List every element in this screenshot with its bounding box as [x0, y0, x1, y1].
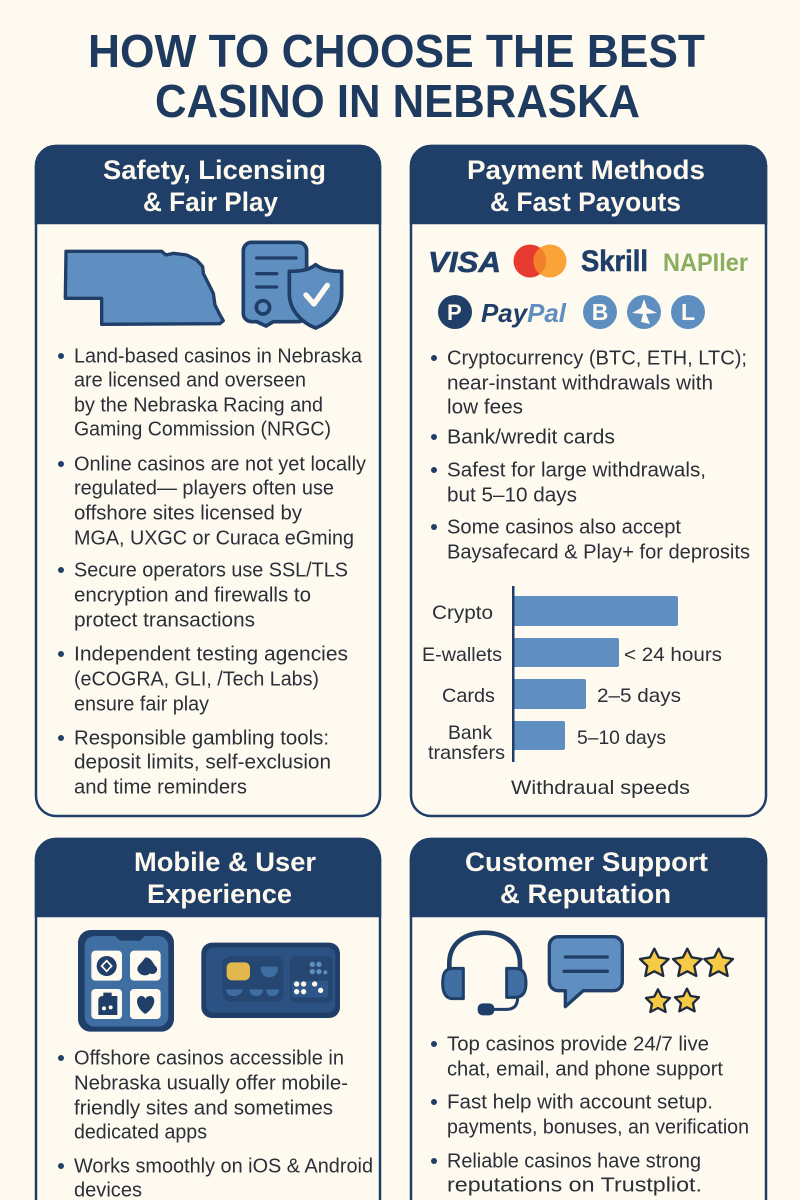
text block: support bullets: payments, bonuses, an verification [447, 1116, 749, 1138]
text block: support bullets: chat, email, and phone support [447, 1058, 723, 1080]
bar: e-wallets: < 24 hours [624, 644, 722, 666]
text block: safety bullets: Land-based casinos in Nebraska [74, 345, 363, 367]
bar chart: withdrawal speeds [422, 586, 722, 799]
bar: cards: 2–5 days [597, 685, 681, 707]
icon: Mastercard logo [514, 244, 566, 278]
text block: safety bullets: Secure operators use SSL/TLS [74, 559, 348, 581]
icon: PayPal logo [438, 295, 567, 329]
text block: support bullets [431, 1033, 749, 1196]
heading: support [411, 839, 766, 916]
text block: payment bullets: Some casinos also accept [447, 516, 681, 538]
text block: mobile bullets: Works smoothly on iOS & Android [74, 1155, 373, 1177]
icon: Litecoin coin: L [681, 299, 695, 325]
bar: bank transfers: 5–10 days [577, 727, 666, 749]
icon: licence document and shield [243, 242, 342, 328]
text block: safety bullets: by the Nebraska Racing and [74, 394, 323, 416]
bar: e-wallets [422, 638, 722, 667]
title [88, 25, 705, 127]
icon: Ethereum coin [627, 295, 661, 329]
text block: safety bullets: Independent testing agencies [74, 643, 348, 665]
heading: payments: Payment Methods [467, 155, 705, 185]
text block: payment bullets: Bank/wredit cards [447, 426, 615, 448]
text block: safety bullets: and time reminders [74, 776, 247, 798]
panel: mobile and user experience [36, 839, 380, 1200]
text block: safety bullets: encryption and firewalls to [74, 584, 311, 606]
icon: PayPal logo: PayPal [481, 298, 567, 328]
heading: mobile: Mobile & User [134, 847, 316, 877]
bar: cards: Cards [442, 685, 495, 707]
text block: safety bullets [58, 345, 366, 798]
bar: bank transfers: transfers [428, 742, 505, 764]
text block: support bullets: Reliable casinos have strong [447, 1150, 701, 1172]
icon: PayPal logo: P [447, 300, 462, 325]
bar: bank transfers: Bank [448, 722, 492, 744]
icon: Skrill logo: Skrill [581, 245, 648, 278]
text block: mobile bullets: Offshore casinos accessible in [74, 1047, 344, 1069]
icon: Visa logo: VISA [428, 247, 501, 279]
text block: safety bullets: protect transactions [74, 609, 255, 631]
text block: safety bullets: ensure fair play [74, 693, 209, 715]
text block: mobile bullets [58, 1047, 373, 1200]
title: HOW TO CHOOSE THE BEST [88, 25, 705, 77]
heading: safety: & Fair Play [143, 187, 278, 217]
heading: safety [36, 146, 380, 223]
text block: safety bullets: MGA, UXGC or Curaca eGming [74, 527, 354, 549]
bar: cards [442, 679, 681, 709]
icon: green wallet logo: NAPIler [663, 249, 748, 277]
icon: Bitcoin coin [583, 295, 617, 329]
text block: safety bullets: regulated— players often use [74, 477, 334, 499]
heading: support: Customer Support [465, 847, 708, 877]
icon: Bitcoin coin: B [592, 299, 608, 325]
text block: payment bullets: Baysafecard & Play+ for deprosits [447, 541, 750, 563]
title: CASINO IN NEBRASKA [155, 75, 640, 127]
icon: game console card [201, 943, 340, 1018]
icon: five rating stars [640, 949, 733, 1012]
bar: e-wallets: E-wallets [422, 644, 502, 666]
text block: safety bullets: are licensed and overseen [74, 369, 306, 391]
text block: support bullets: Fast help with account setup. [447, 1091, 713, 1113]
bar: crypto: Crypto [432, 602, 493, 624]
text block: mobile bullets: Nebraska usually offer mobile- [74, 1072, 348, 1094]
text block: support bullets: Top casinos provide 24/7 live [447, 1033, 709, 1055]
bar: crypto [432, 596, 678, 626]
icon: phone with app tiles [78, 930, 174, 1032]
text block: payment bullets [431, 347, 750, 563]
icon: headset [443, 933, 526, 1015]
panel: safety, licensing and fair play [36, 146, 380, 816]
text block: payment bullets: low fees [447, 396, 523, 418]
text block: mobile bullets: friendly sites and sometimes [74, 1097, 333, 1119]
text block: payment bullets: near-instant withdrawals with [447, 372, 713, 394]
text block: payment bullets: Cryptocurrency (BTC, ETH, LTC); [447, 347, 747, 369]
text block: safety bullets: Responsible gambling tools: [74, 727, 329, 749]
heading: mobile: Experience [147, 879, 292, 909]
text block: safety bullets: (eCOGRA, GLI, /Tech Labs) [74, 668, 319, 690]
panel: customer support and reputation [411, 839, 766, 1200]
panel: payment methods and fast payouts [411, 146, 766, 816]
text block: safety bullets: Online casinos are not yet locally [74, 453, 366, 475]
heading: mobile [36, 839, 380, 916]
icon: Litecoin coin [671, 295, 705, 329]
text block: support bullets: reputations on Trustpliot. [447, 1174, 702, 1196]
heading: support: & Reputation [500, 879, 671, 909]
bar: bank transfers [428, 721, 666, 764]
heading: safety: Safety, Licensing [103, 155, 326, 185]
text block: mobile bullets: dedicated apps [74, 1121, 207, 1143]
text block: payment bullets: Safest for large withdrawals, [447, 459, 706, 481]
text block: safety bullets: deposit limits, self-exclusion [74, 751, 331, 773]
chart caption: Withdraual speeds [511, 777, 690, 799]
icon: Nebraska map [65, 251, 223, 324]
heading: payments: & Fast Payouts [490, 187, 681, 217]
text block: safety bullets: Gaming Commission (NRGC) [74, 418, 331, 440]
text block: payment bullets: but 5–10 days [447, 484, 577, 506]
text block: safety bullets: offshore sites licensed by [74, 502, 302, 524]
heading: payments [411, 146, 766, 223]
icon: chat bubble [549, 937, 622, 1007]
